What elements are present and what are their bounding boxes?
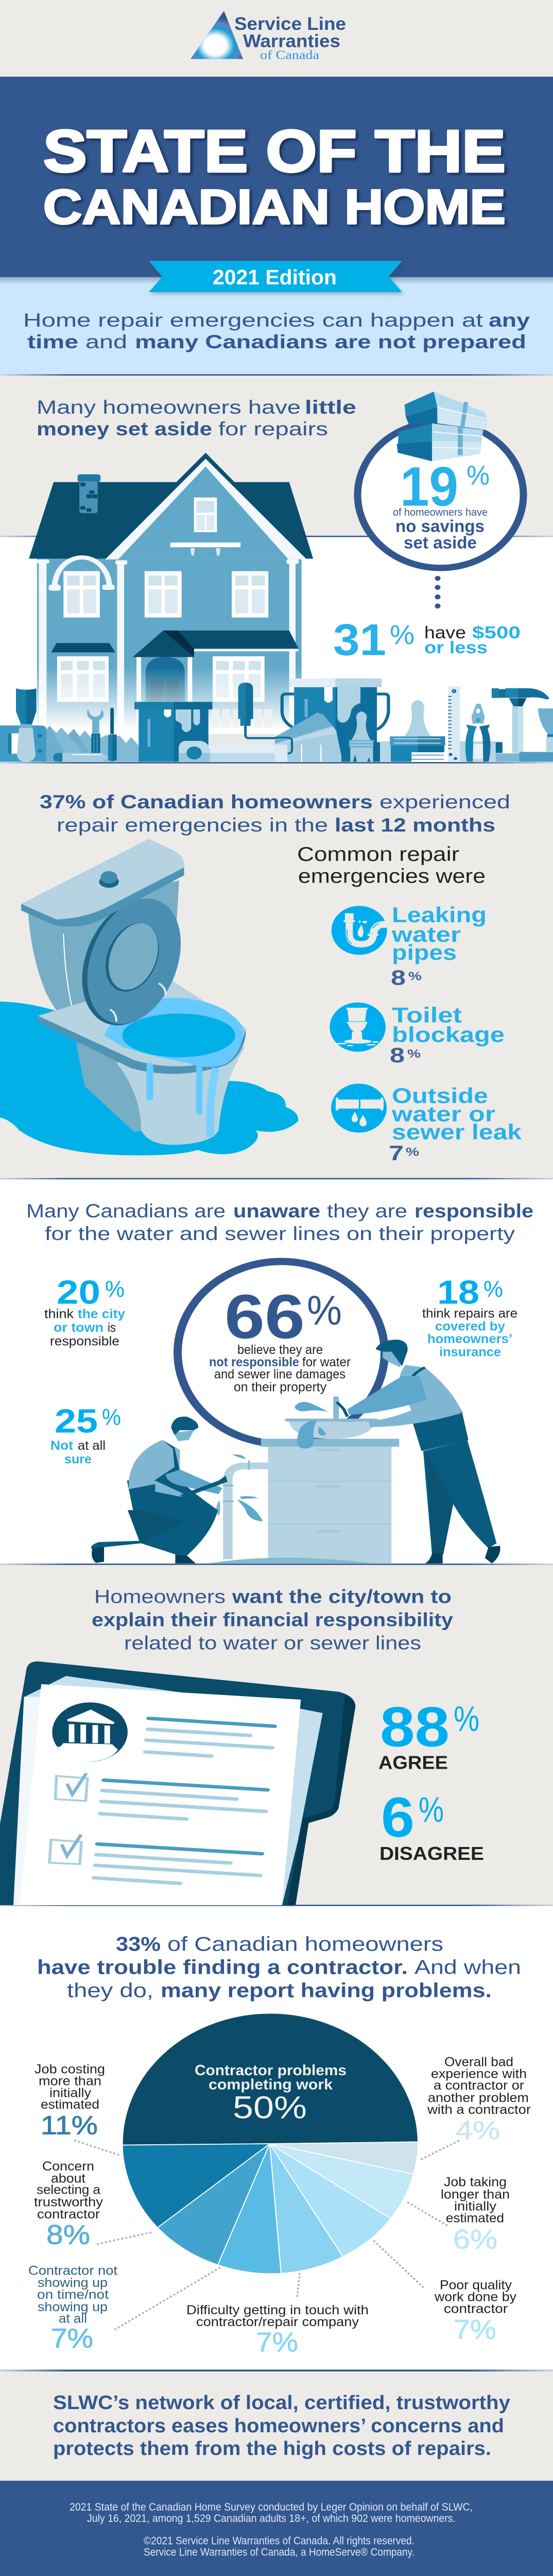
illustration: plumbers at sink [91, 1340, 500, 1564]
stat: 25% not at all sure: Not [50, 1438, 73, 1452]
title [43, 118, 506, 234]
plumber standing [348, 1340, 500, 1564]
pie label: contractor problems completing work 50% [195, 2062, 347, 2125]
label: difficulty getting in touch 7% [186, 2303, 369, 2357]
item: toilet blockage: % [407, 1048, 421, 1061]
stat: 31% have $500 or less: have [424, 623, 466, 642]
text: common repair emergencies: emergencies were [298, 865, 486, 887]
icon: money stack [397, 392, 488, 461]
stat: 31% have $500 or less [333, 615, 521, 665]
stat: 66% believe not responsible: not responsible [209, 1354, 299, 1369]
label: job taking longer 6% [441, 2175, 510, 2255]
heading: unaware of responsibility: they are [327, 1200, 407, 1222]
stat: 20% the city or town: the city [78, 1307, 125, 1321]
heading: trouble finding a contractor: many report having problems. [161, 1979, 492, 2002]
stat: 6% disagree: % [419, 1789, 444, 1829]
closing statement: SLWC’s network of local, certified, trustworthy [53, 2391, 510, 2413]
heading: repair emergencies: last 12 months [335, 815, 495, 836]
plumber kneeling [91, 1416, 228, 1564]
label: concern about selecting 8%: Concern [42, 2159, 94, 2173]
item: leaking water pipes: pipes [392, 941, 457, 964]
stat: 6% disagree: DISAGREE [379, 1843, 484, 1864]
item: leaking water pipes [332, 903, 487, 990]
stat: 66% believe not responsible: and sewer line damages [214, 1367, 345, 1381]
stat: 20% the city or town: responsible [50, 1334, 119, 1348]
heading: repair emergencies: 37% of Canadian homeowners [40, 791, 373, 812]
label: overall bad experience 4%: another problem [428, 2091, 529, 2105]
label: poor quality work 7%: work done by [434, 2290, 517, 2304]
heading: want the city to explain: explain their financial responsibility [92, 1609, 453, 1631]
stat: 66% believe not responsible: believe they are [237, 1343, 323, 1357]
label: job taking longer 6%: initially [454, 2199, 497, 2213]
label: concern about selecting 8%: trustworthy [34, 2195, 103, 2209]
stat: 31% have $500 or less: % [390, 620, 414, 650]
heading: trouble finding a contractor: they do, [67, 1979, 153, 2002]
pie label: contractor problems completing work 50%: Contractor problems [195, 2062, 347, 2079]
label: job costing 11%: Job costing [34, 2062, 105, 2076]
label: poor quality work 7%: contractor [444, 2301, 508, 2316]
stat: 31% have $500 or less: 31 [333, 615, 386, 665]
callout: 19% circle: set aside [404, 533, 477, 552]
label: overall bad experience 4% [427, 2055, 531, 2145]
label: concern about selecting 8% [34, 2159, 103, 2250]
text: common repair emergencies [297, 843, 486, 887]
illustration: tools left [0, 683, 276, 762]
label: contractor not showing up 7%: at all [59, 2311, 87, 2326]
text: common repair emergencies: Common repair [297, 843, 459, 865]
water pipe and spray [208, 1454, 374, 1564]
icon: checkbox [49, 1835, 81, 1864]
heading: unaware of responsibility: Many Canadians are [26, 1200, 226, 1222]
title: STATE OF THE [43, 118, 506, 184]
stat: 31% have $500 or less: $500 [472, 623, 521, 642]
label: overall bad experience 4%: 4% [456, 2115, 500, 2145]
label: job taking longer 6%: 6% [453, 2224, 497, 2255]
stat: 88% agree: % [454, 1699, 479, 1739]
stat: 18% homeowners' insurance: homeowners’ [427, 1332, 512, 1346]
pie label: contractor problems completing work 50%: 50% [233, 2090, 307, 2125]
label: poor quality work 7% [434, 2278, 517, 2345]
item: outside water or sewer leak: water or [391, 1103, 495, 1126]
callout: 19% circle: 19 [400, 456, 458, 518]
stat: 18% homeowners' insurance: insurance [439, 1345, 501, 1359]
heading: want the city to explain: Homeowners [94, 1586, 226, 1607]
stat: 18% homeowners' insurance: 18 [437, 1273, 479, 1311]
item: outside water or sewer leak: sewer leak [392, 1121, 522, 1144]
stat: 18% homeowners' insurance: % [483, 1276, 503, 1302]
icon: checkbox [56, 1773, 88, 1801]
heading: want the city to explain: related to water or sewer lines [124, 1633, 421, 1654]
item: outside water or sewer leak [331, 1083, 522, 1165]
label: contractor not showing up 7% [28, 2263, 118, 2353]
stat: 18% homeowners' insurance [422, 1273, 517, 1359]
stat: 18% homeowners' insurance: think repairs are [422, 1306, 517, 1320]
stat: 66% believe not responsible: 66 [224, 1281, 305, 1351]
item: leaking water pipes: 8 [391, 967, 406, 990]
connector dots [435, 576, 441, 608]
item: outside water or sewer leak: Outside [392, 1084, 488, 1108]
label: concern about selecting 8%: contractor [37, 2207, 100, 2222]
heading: trouble finding a contractor: And when [414, 1956, 521, 1978]
illustration: overflowing toilet [0, 839, 298, 1156]
label: overall bad experience 4%: with a contractor [427, 2102, 531, 2116]
label: job taking longer 6%: estimated [446, 2211, 504, 2225]
subtitle band: and [85, 331, 127, 353]
stat: 25% not at all sure: sure [64, 1452, 92, 1466]
closing statement: contractors eases homeowners’ concerns and [53, 2414, 504, 2436]
label: concern about selecting 8%: about [51, 2171, 86, 2185]
heading: money set aside: little [305, 397, 356, 418]
pie chart: contractor problems [123, 2013, 418, 2274]
heading: money set aside [37, 397, 356, 440]
footer: Service Line Warranties of Canada, a HomeServe® Company. [144, 2546, 414, 2558]
logo: of Canada [260, 48, 319, 62]
label: concern about selecting 8%: 8% [46, 2219, 90, 2250]
callout: 19% circle: % [466, 460, 490, 490]
heading: money set aside: for repairs [218, 419, 328, 440]
item: outside water or sewer leak: 7 [389, 1142, 404, 1165]
illustration: house [21, 453, 314, 745]
ring: 66% circle [178, 1261, 385, 1444]
leader lines [75, 2141, 458, 2330]
callout: 19% circle [357, 392, 523, 568]
icon: leaking pipe [332, 906, 387, 955]
heading: want the city to explain: want the city/town to [232, 1586, 452, 1607]
stat: 88% agree [378, 1696, 479, 1773]
callout: 19% circle: of homeowners have [393, 506, 488, 518]
label: contractor not showing up 7%: on time/not [37, 2287, 109, 2302]
label: concern about selecting 8%: selecting a [37, 2182, 100, 2197]
label: job costing 11% [34, 2062, 105, 2140]
icon: broken pipe [331, 1083, 387, 1132]
footer [0, 2481, 553, 2576]
stat: 20% the city or town: or town [54, 1320, 103, 1335]
heading: repair emergencies [40, 791, 510, 836]
closing statement: protects them from the high costs of repairs. [53, 2437, 491, 2459]
footer: 2021 State of the Canadian Home Survey conducted by Leger Opinion on behalf of SLWC, [70, 2501, 473, 2513]
item: toilet blockage [330, 1003, 505, 1067]
footer: ©2021 Service Line Warranties of Canada. All rights reserved. [144, 2535, 414, 2547]
heading: repair emergencies: experienced [379, 791, 510, 812]
heading: money set aside: money set aside [37, 419, 212, 440]
stat: 6% disagree [379, 1786, 484, 1864]
label: job costing 11%: 11% [41, 2111, 98, 2140]
stat: 66% believe not responsible: for water [302, 1354, 351, 1369]
stat: 25% not at all sure [50, 1402, 121, 1466]
stat: 31% have $500 or less: or less [424, 638, 488, 657]
stat: 25% not at all sure: 25 [55, 1402, 98, 1439]
stat: 66% believe not responsible: on their property [234, 1380, 327, 1394]
label: difficulty getting in touch 7%: 7% [256, 2327, 298, 2357]
stat: 20% the city or town [44, 1273, 125, 1348]
stat: 20% the city or town: % [105, 1276, 125, 1302]
logo: Service Line [234, 13, 346, 34]
callout: 19% circle: no savings [395, 517, 485, 536]
item: outside water or sewer leak: % [406, 1146, 419, 1159]
label: overall bad experience 4%: Overall bad [444, 2055, 513, 2069]
sink cabinet [261, 1396, 399, 1564]
stat: 88% agree: AGREE [378, 1753, 448, 1773]
closing statement [53, 2391, 510, 2459]
heading: repair emergencies: repair emergencies in the [57, 815, 328, 836]
heading: trouble finding a contractor: have trouble finding a contractor. [37, 1956, 408, 1978]
label: poor quality work 7%: Poor quality [440, 2278, 512, 2292]
logo: Warranties [243, 31, 340, 51]
subtitle band: any [489, 310, 530, 331]
label: difficulty getting in touch 7%: Difficulty getting in touch with [186, 2303, 369, 2317]
heading: want the city to explain [92, 1586, 453, 1654]
subtitle band: time [27, 331, 78, 353]
stat: 18% homeowners' insurance: covered by [435, 1319, 505, 1333]
label: overall bad experience 4%: experience with [431, 2066, 527, 2081]
heading: trouble finding a contractor: 33% [116, 1933, 161, 1955]
logo [191, 11, 346, 62]
illustration: tools right [275, 679, 553, 762]
icon: city hall seal [52, 1702, 128, 1761]
stat: 20% the city or town: 20 [57, 1273, 100, 1311]
label: contractor not showing up 7%: 7% [51, 2323, 93, 2353]
subtitle band [0, 277, 553, 376]
item: toilet blockage: blockage [392, 1023, 505, 1047]
label: contractor not showing up 7%: showing up [38, 2276, 108, 2290]
title banner [0, 77, 553, 277]
edition ribbon: 2021 Edition [213, 266, 337, 289]
label: job taking longer 6%: Job taking [444, 2175, 507, 2189]
stat: 88% agree: 88 [380, 1696, 450, 1758]
stat: 25% not at all sure: at all [78, 1438, 106, 1452]
label: job costing 11%: more than [39, 2074, 101, 2088]
stat: 66% believe not responsible: % [307, 1287, 342, 1334]
stat: 20% the city or town: think [44, 1307, 74, 1321]
pie label: contractor problems completing work 50%: completing work [209, 2076, 333, 2093]
stat: 25% not at all sure: % [102, 1404, 121, 1430]
label: difficulty getting in touch 7%: contractor/repair company [196, 2314, 359, 2329]
label: job costing 11%: estimated [41, 2097, 99, 2112]
title: CANADIAN HOME [43, 180, 506, 234]
label: overall bad experience 4%: a contractor or [434, 2078, 524, 2093]
icon: toilet [330, 1003, 386, 1052]
heading: unaware of responsibility: for the water and sewer lines on their property [45, 1223, 515, 1245]
stat: 66% believe not responsible [209, 1281, 351, 1394]
subtitle band: many Canadians are not prepared [135, 331, 526, 353]
stat: 6% disagree: 6 [381, 1786, 414, 1849]
label: contractor not showing up 7%: Contractor not [28, 2263, 118, 2278]
heading: unaware of responsibility: unaware [233, 1200, 320, 1222]
footer: July 16, 2021, among 1,529 Canadian adults 18+, of which 902 were homeowners. [87, 2513, 456, 2524]
label: job costing 11%: initially [49, 2086, 92, 2100]
heading: unaware of responsibility [26, 1200, 533, 1245]
item: leaking water pipes: % [408, 970, 422, 983]
heading: unaware of responsibility: responsible [414, 1200, 533, 1222]
label: job taking longer 6%: longer than [441, 2187, 510, 2201]
item: toilet blockage: 8 [390, 1044, 405, 1067]
illustration: document folder [0, 1662, 355, 1905]
stat: 20% the city or town: is [108, 1320, 116, 1335]
label: contractor not showing up 7%: showing up [38, 2299, 108, 2314]
label: poor quality work 7%: 7% [454, 2314, 496, 2345]
heading: trouble finding a contractor [37, 1933, 521, 2002]
heading: money set aside: Many homeowners have [37, 397, 301, 418]
item: leaking water pipes: water [391, 923, 461, 946]
item: toilet blockage: Toilet [392, 1004, 462, 1027]
edition ribbon [149, 261, 402, 292]
heading: trouble finding a contractor: of Canadian homeowners [167, 1933, 443, 1955]
subtitle band: Home repair emergencies can happen at [23, 310, 483, 331]
item: leaking water pipes: Leaking [392, 903, 487, 927]
